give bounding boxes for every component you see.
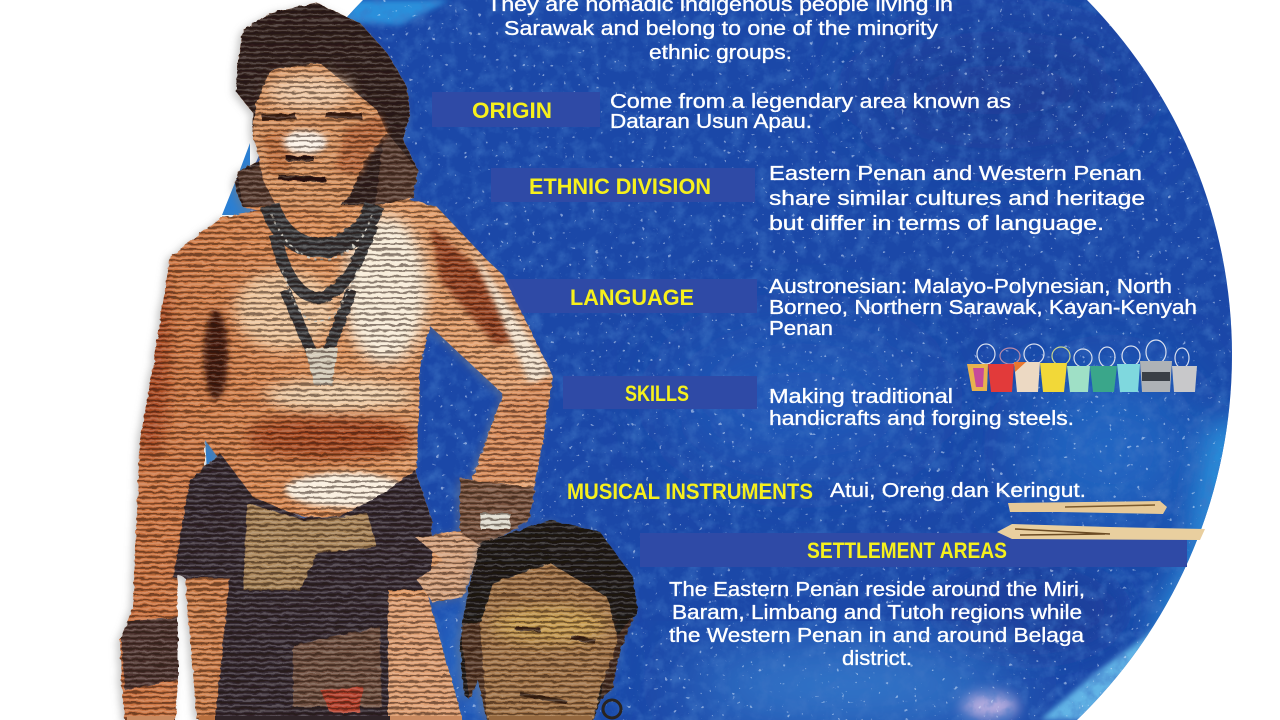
label: skills: SKILLS [625,381,689,406]
label: musical instruments: MUSICAL INSTRUMENTS [567,479,813,504]
text block: origin [610,91,1011,133]
shading: chest highlights [343,215,427,365]
text block: origin: Dataran Usun Apau. [610,111,812,133]
left leg [194,578,230,718]
hand on hip [415,533,482,603]
label: ethnic division: ETHNIC DIVISION [529,174,711,199]
icon: bamboo musical instrument, lower [997,524,1205,540]
label: skills [563,376,757,409]
text block: origin: Come from a legendary area known as [610,91,1011,113]
text block: settlement areas: the Western Penan in and around Belaga [669,625,1085,647]
text block: ethnic division: Eastern Penan and Western Penan [769,163,1142,185]
right lower arm [470,376,553,485]
text block: ethnic division: share similar cultures and heritage [769,188,1145,210]
text block: settlement areas: district. [842,648,912,670]
text block: intro: Sarawak and belong to one of the minority [504,18,938,40]
necklaces [270,205,375,372]
red tassels [320,687,363,712]
text block: language [769,276,1197,340]
brush edge: left of circle [205,143,250,478]
text block: skills: handicrafts and forging steels. [769,408,1074,430]
fringe belt [243,503,377,590]
label: language [508,279,757,313]
skirt [173,453,432,720]
label: settlement areas [640,533,1187,567]
text block: language: Borneo, Northern Sarawak, Kayan-Kenyah [769,297,1197,319]
icon: woman's ear ring [603,700,621,718]
face [252,63,387,213]
figure: Penan man [110,0,560,720]
text block: intro: ethnic groups. [649,42,792,64]
text block: language: Austronesian: Malayo-Polynesian, North [769,276,1172,298]
lower panel [293,627,382,707]
text block: settlement areas: The Eastern Penan reside around the Miri, [669,579,1085,601]
label: ethnic division [491,168,755,202]
label: language: LANGUAGE [570,285,694,310]
bracelet left [120,617,178,690]
text block: skills: Making traditional [769,386,953,408]
right leg [388,597,463,720]
text block: language: Penan [769,318,833,340]
pendant [305,348,338,385]
text block: ethnic division [769,163,1145,235]
text block: skills [769,386,1074,430]
label: origin: ORIGIN [472,98,552,123]
text block: settlement areas [669,579,1085,670]
label: settlement areas: SETTLEMENT AREAS [807,538,1007,563]
label: origin [432,92,600,127]
text block: intro [487,0,953,64]
bracelet right [460,478,535,547]
figure: Penan woman [455,515,645,720]
text block: ethnic division: but differ in terms of language. [769,213,1104,235]
text block: settlement areas: Baram, Limbang and Tutoh regions while [672,602,1082,624]
text block: musical instruments: Atui, Oreng dan Keringut. [830,480,1086,502]
bottom edge fill under figures [127,716,592,720]
hair [235,3,418,207]
icon: handicraft bags [967,340,1197,392]
icon: bamboo musical instrument, upper [1008,501,1167,514]
